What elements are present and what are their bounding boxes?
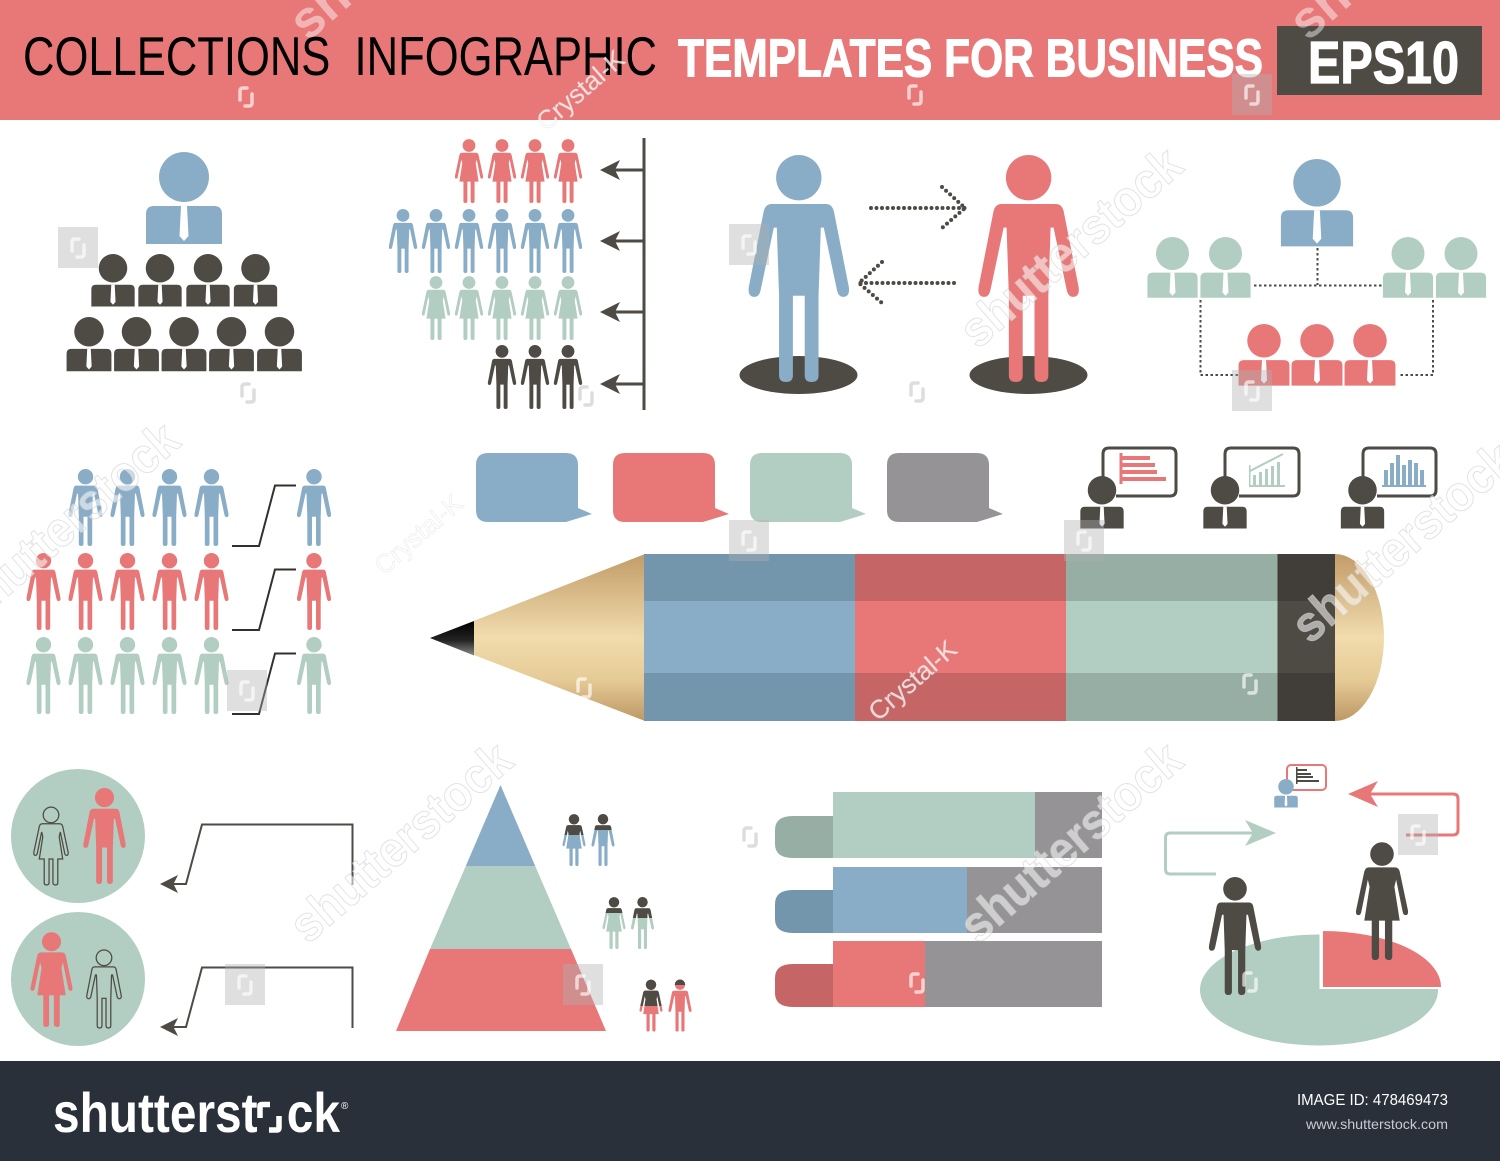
man on pie	[1209, 877, 1261, 995]
pink segment	[855, 554, 1067, 721]
step connectors	[232, 486, 296, 714]
pink loop arrow	[1348, 781, 1458, 835]
speech bubbles	[476, 453, 1003, 522]
pink bar	[775, 941, 1102, 1007]
watermark overlay: shutterstock	[948, 136, 1193, 358]
pie	[1200, 934, 1438, 1045]
blue figure	[749, 155, 849, 382]
presenter with blue column chart	[1341, 448, 1436, 528]
presenter with green column chart	[1203, 448, 1299, 528]
watermark overlay: Crystal-K	[530, 43, 631, 137]
header banner	[0, 0, 1500, 120]
wooden tip	[430, 554, 645, 721]
pyramid people: green pair	[603, 897, 654, 949]
dotted arrow left	[859, 262, 954, 303]
pink women row	[455, 139, 582, 203]
people rows with arrows	[389, 138, 646, 410]
pyramid people: blue pair	[563, 814, 615, 866]
dark men row	[488, 345, 582, 409]
pie chart with figures	[1166, 765, 1458, 1045]
people grid with connectors	[26, 469, 331, 714]
stacked progress bars	[775, 792, 1102, 1007]
green bar	[775, 792, 1102, 858]
pyramid	[396, 785, 606, 1031]
pink men	[26, 553, 331, 630]
graphite point	[430, 621, 474, 656]
green women row	[422, 276, 582, 340]
ferrule band	[1278, 554, 1335, 721]
shutterstock logo: shutterstock	[53, 1081, 341, 1144]
title: collections infographic: COLLECTIONS INFOGRAPHIC	[23, 25, 657, 87]
exchange between two figures	[740, 155, 1088, 394]
watermark overlay: shutterstock	[278, 731, 523, 953]
gender circle two	[11, 912, 145, 1046]
dotted connectors	[1200, 248, 1433, 375]
watermark overlay: Crystal-K	[862, 633, 963, 727]
watermark overlay: shutterstock	[948, 731, 1193, 953]
pencil end	[1335, 554, 1384, 721]
callout arrow two	[160, 968, 352, 1036]
green segment	[1066, 554, 1278, 721]
subtitle: templates for business: TEMPLATES FOR BUSINESS	[678, 28, 1263, 88]
blue bar	[775, 867, 1102, 933]
dotted arrow right	[871, 187, 965, 228]
badge: eps10: EPS10	[1308, 30, 1459, 96]
image id: IMAGE ID: 478469473	[1297, 1092, 1448, 1109]
green men	[26, 637, 331, 714]
woman on pie	[1356, 842, 1408, 960]
footer bar	[0, 1061, 1500, 1161]
organisation chart	[1147, 159, 1486, 386]
pyramid people: pink pair	[640, 980, 692, 1032]
pencil	[430, 554, 1384, 721]
blue men row	[389, 209, 582, 273]
hierarchy of business people	[67, 152, 302, 371]
shutterstock logo: ®	[341, 1101, 349, 1112]
dark platforms	[740, 356, 1088, 394]
blue segment	[644, 554, 856, 721]
watermark overlay: Crystal-K	[368, 487, 469, 581]
green loop arrow	[1166, 820, 1276, 874]
presenter with pink bar chart	[1080, 448, 1176, 528]
mini presenter	[1274, 765, 1326, 808]
arrows and vertical axis	[600, 138, 646, 410]
website: www.shutterstock.com	[1305, 1116, 1448, 1132]
gender circle one	[11, 769, 145, 903]
blue men	[68, 469, 331, 546]
pink figure	[978, 155, 1079, 382]
callout arrow one	[160, 824, 352, 893]
